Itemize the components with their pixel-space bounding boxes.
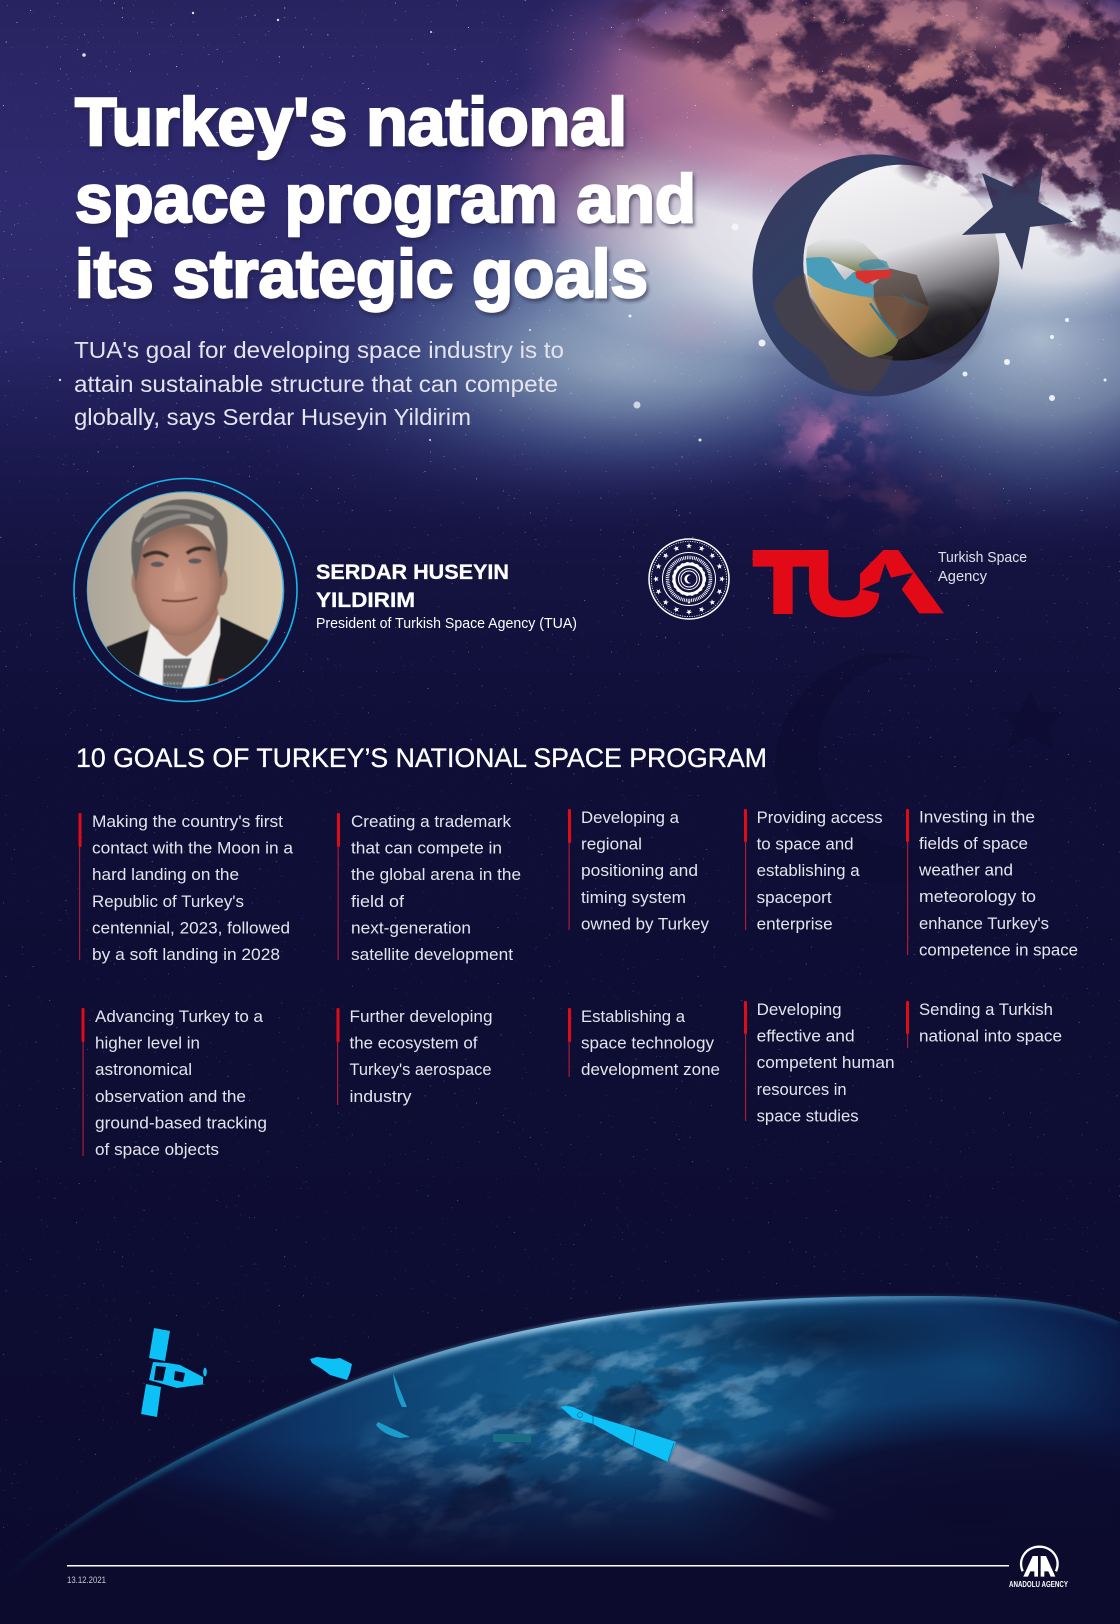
goal 2: the global arena in the [351,866,521,884]
goal 2: Creating a trademark [351,813,512,831]
goal 9: competent human [757,1054,895,1072]
goal 6: of space objects [95,1141,219,1159]
inner disk [803,165,999,361]
goal 1: Republic of Turkey's [92,893,244,911]
goal 5: fields of space [919,835,1028,853]
goal 10: national into space [919,1028,1062,1046]
goal 2 [337,813,521,964]
bright stars [59,12,1106,442]
goal 3: regional [581,836,642,854]
goal 10: Sending a Turkish [919,1001,1053,1019]
title [75,84,696,312]
goal 3: owned by Turkey [581,915,710,933]
goal 8: space technology [581,1035,715,1053]
goal 8: development zone [581,1061,720,1079]
goal 6: ground-based tracking [95,1114,267,1132]
goal 4: spaceport [757,889,832,907]
subtitle: TUA's goal for developing space industry is to [74,337,564,363]
goal 5: Investing in the [919,808,1035,826]
name and role: YILDIRIM [316,588,415,612]
logo caption: Turkish Space Agency [938,550,1027,585]
goal 1: by a soft landing in 2028 [92,946,280,964]
icon: detached fairing pieces [376,1373,531,1442]
logo: Anadolu Agency [1009,1547,1068,1589]
name and role: President of Turkish Space Agency (TUA) [316,615,577,632]
faint background crescent and star [775,653,1066,883]
goal 7: the ecosystem of [350,1035,478,1053]
goal 4: enterprise [757,915,833,933]
goal 8 [568,1008,720,1079]
goal 7: industry [350,1088,412,1106]
goal 9 [744,1001,895,1125]
goal 10 [906,1001,1062,1048]
earth map [773,237,987,390]
goal 4: to space and [757,836,854,854]
icon: satellite [141,1328,207,1417]
subtitle: globally, says Serdar Huseyin Yildirim [74,404,471,430]
goal 3: Developing a [581,809,680,827]
title: Turkey's national [75,84,627,160]
goal 5 [906,808,1078,959]
star [962,163,1073,270]
goal 8: Establishing a [581,1008,686,1026]
rocket exhaust plume [668,1443,840,1522]
goal 6: observation and the [95,1088,246,1106]
logo caption: Turkish Space Agency: Agency [938,569,988,585]
goal 1: Making the country's first [92,813,283,831]
icon: rocket [561,1406,676,1462]
name and role [316,560,577,632]
footer rule [67,1565,1009,1566]
goal 5: weather and [918,862,1013,880]
goal 4: establishing a [757,862,860,880]
goal 7: Further developing [350,1008,492,1026]
crescent [753,154,992,396]
goal 5: competence in space [919,941,1078,959]
icon: small spacecraft part [310,1357,352,1380]
goal 1: hard landing on the [92,866,239,884]
goal 6 [82,1008,267,1159]
goal 7: Turkey's aerospace [350,1061,492,1079]
goal 2: field of [351,893,404,911]
goal 1: contact with the Moon in a [92,840,294,858]
logo caption: Turkish Space Agency: Turkish Space [938,550,1027,566]
goal 2: that can compete in [351,840,502,858]
goal 6: astronomical [95,1061,192,1079]
goal 2: next-generation [351,919,471,937]
dust overlapping the disk top [880,100,1120,200]
goal 4 [744,809,883,933]
goal 6: Advancing Turkey to a [95,1008,264,1026]
goal 5: meteorology to [919,888,1036,906]
subtitle: attain sustainable structure that can compete [74,371,558,397]
goal 9: Developing [757,1001,842,1019]
title: its strategic goals [75,236,648,312]
goal 1 [78,813,294,964]
goal 6: higher level in [95,1035,200,1053]
title: space program and [75,161,696,237]
logo: Anadolu Agency: ANADOLU AGENCY [1009,1579,1068,1589]
nebula: salmon and plum dust clouds [490,0,1120,278]
name and role: SERDAR HUSEYIN [316,560,509,584]
goal 9: resources in [757,1081,847,1099]
logo: ministry seal [649,539,729,619]
goal 1: centennial, 2023, followed [92,919,290,937]
goal 4: Providing access [757,809,883,827]
goal 9: effective and [757,1028,855,1046]
goal 3 [568,809,710,933]
logo: TUA [753,550,944,617]
earth [0,1294,1120,1624]
heading: 10 goals: 10 GOALS OF TURKEY’S NATIONAL SPACE PROGRAM [76,743,767,773]
goal 5: enhance Turkey's [919,915,1049,933]
subtitle [74,337,564,430]
goal 7 [336,1008,492,1106]
portrait of Serdar Huseyin Yildirim [74,478,297,702]
goal 3: timing system [581,889,686,907]
icon: crescent, star and Earth [753,154,1073,396]
date: 13.12.2021 [67,1575,106,1585]
goal 2: satellite development [351,946,513,964]
goal 3: positioning and [581,862,698,880]
goal 9: space studies [757,1107,859,1125]
